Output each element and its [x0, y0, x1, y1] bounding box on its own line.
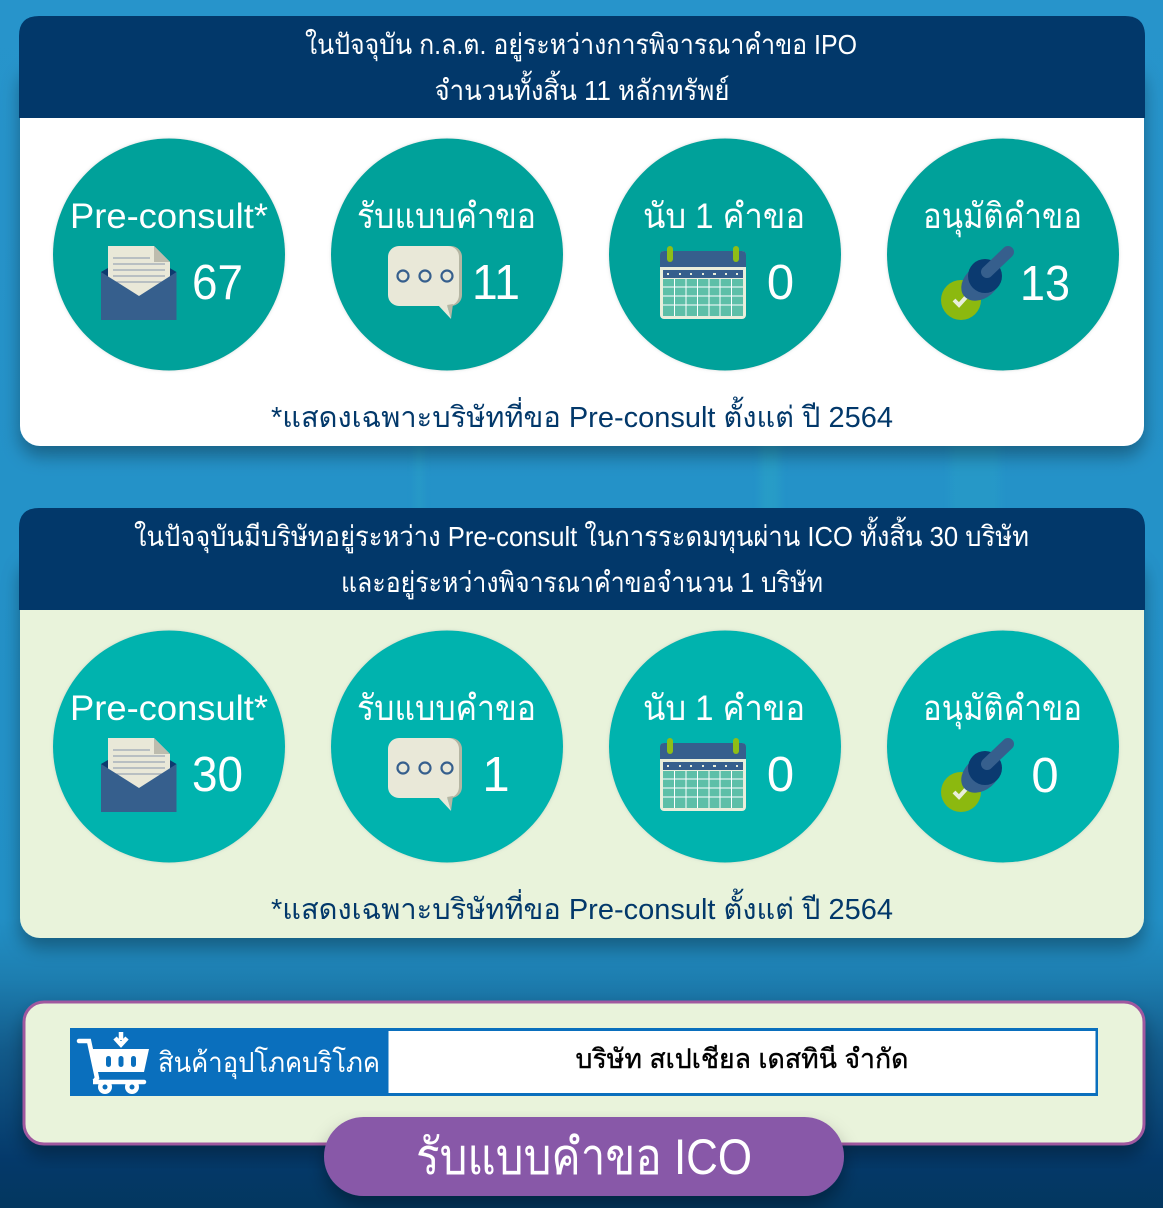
circle: Pre-consult 67: 67	[192, 256, 243, 310]
footnote: *แสดงเฉพาะบริษัทที่ขอ Pre-consult ตั้งแต่ ปี 2564	[271, 888, 893, 926]
heading line 2: และอยู่ระหว่างพิจารณาคำขอจำนวน 1 บริษัท	[341, 567, 823, 600]
circle: approved 13: อนุมัติคำขอ	[923, 197, 1082, 237]
circle: day one 0: 0	[767, 748, 794, 802]
circle: approved 0: อนุมัติคำขอ	[923, 689, 1082, 729]
circle: Pre-consult 30: 30	[192, 748, 243, 802]
circle: form received 1: 1	[482, 748, 510, 802]
icon: shopping cart	[79, 1032, 149, 1094]
circle: approved 13	[887, 138, 1119, 370]
footnote: *แสดงเฉพาะบริษัทที่ขอ Pre-consult ตั้งแต่ ปี 2564	[271, 396, 893, 434]
category row	[70, 1028, 1098, 1096]
circle: approved 0	[887, 630, 1119, 862]
heading line 1: ในปัจจุบันมีบริษัทอยู่ระหว่าง Pre-consult ในการระดมทุนผ่าน ICO ทั้งสิ้น 30 บริษัท	[134, 516, 1029, 554]
heading line 1: ในปัจจุบัน ก.ล.ต. อยู่ระหว่างการพิจารณาคำขอ IPO	[305, 28, 857, 62]
purple title pill	[324, 1117, 844, 1196]
circle: approved 0: 0	[1031, 749, 1059, 803]
panel body: ICO	[20, 552, 1144, 938]
circle: day one 0: นับ 1 คำขอ	[643, 689, 805, 728]
circle: day one 0: 0	[767, 256, 794, 310]
panel header: IPO	[19, 16, 1145, 118]
circle: Pre-consult 67: Pre-consult*	[70, 197, 268, 236]
circle: approved 13: 13	[1020, 257, 1070, 311]
icon: envelope	[101, 738, 176, 812]
panel header: ICO	[19, 508, 1145, 610]
icon: calendar	[660, 738, 746, 811]
panel body: IPO	[20, 60, 1144, 446]
circle: Pre-consult 30	[53, 630, 285, 862]
circle: day one 0	[609, 630, 841, 862]
icon: speech bubble	[388, 738, 462, 811]
heading line 2: จำนวนทั้งสิ้น 11 หลักทรัพย์	[434, 70, 730, 106]
circle: form received 11: 11	[472, 256, 520, 310]
panel: ICO	[19, 508, 1145, 938]
circle: Pre-consult 67	[53, 138, 285, 370]
icon: stamp	[941, 252, 1008, 320]
panel: IPO	[19, 16, 1145, 446]
company name: บริษัท สเปเชียล เดสทินี จำกัด	[576, 1044, 908, 1074]
circle: form received 1: รับแบบคำขอ	[357, 689, 536, 728]
circle: form received 11	[331, 138, 563, 370]
icon: stamp	[941, 744, 1008, 812]
purple title pill: รับแบบคำขอ ICO	[416, 1129, 752, 1185]
circle: form received 1	[331, 630, 563, 862]
circle: Pre-consult 30: Pre-consult*	[70, 689, 268, 728]
circle: day one 0: นับ 1 คำขอ	[643, 197, 805, 236]
icon: calendar	[660, 246, 746, 319]
icon: speech bubble	[388, 246, 462, 319]
circle: day one 0	[609, 138, 841, 370]
card	[24, 1002, 1144, 1144]
category label: สินค้าอุปโภคบริโภค	[158, 1046, 380, 1080]
panel: ICO applicants	[24, 1002, 1144, 1196]
circle: form received 11: รับแบบคำขอ	[357, 197, 536, 236]
icon: envelope	[101, 246, 176, 320]
